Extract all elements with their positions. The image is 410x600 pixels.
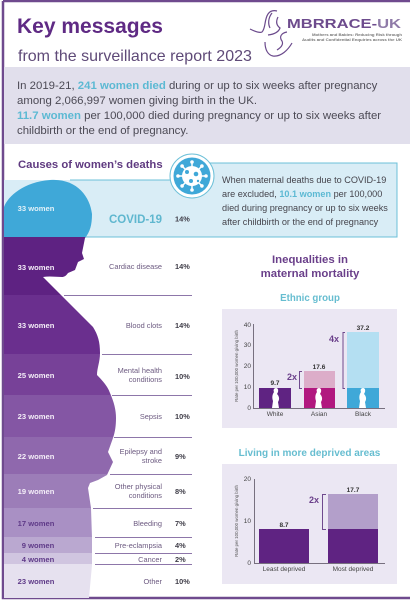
heading: ethnic group: Ethnic group: [280, 293, 340, 304]
heading: inequalities: maternal mortality: [261, 268, 360, 280]
logo: strapline: [302, 33, 403, 42]
cause labels: COVID-19: [109, 214, 162, 226]
chart: deprivation: Rate per 100,000 women giving birth: [234, 485, 239, 557]
panel: headline statistics: [4, 67, 410, 144]
text block: headline statistics: [17, 80, 381, 137]
callout text: When maternal deaths due to COVID-19: [222, 175, 386, 185]
women counts: 22 women: [18, 452, 55, 461]
category labels: [267, 411, 372, 418]
bar: Black: [347, 332, 379, 408]
cause labels: conditions: [129, 375, 162, 384]
multipliers: 2x: [287, 372, 297, 382]
cause labels: Blood clots: [126, 321, 162, 330]
y axis: 0: [247, 405, 251, 412]
cause labels: Pre-eclampsia: [115, 541, 163, 550]
category labels: Least deprived: [263, 566, 306, 573]
callout text: [222, 175, 388, 227]
text block: headline statistics: childbirth or the end of pregnancy.: [17, 125, 188, 137]
y axis: 0: [247, 560, 251, 567]
category labels: White: [267, 411, 284, 418]
bar values: 17.7: [347, 487, 360, 494]
cause labels: stroke: [142, 456, 162, 465]
multipliers: [287, 334, 339, 382]
chart: deprivation: [222, 464, 397, 584]
y axis: 10: [244, 384, 251, 391]
women counts: 23 women: [18, 577, 55, 586]
bar values: [279, 487, 360, 529]
callout text: are excluded, 10.1 women per 100,000: [222, 189, 382, 199]
heading: inequalities: Inequalities in: [272, 254, 348, 266]
women counts: 25 women: [18, 371, 55, 380]
y axis: 20: [244, 363, 251, 370]
cause labels: Sepsis: [140, 412, 162, 421]
multipliers: 4x: [329, 334, 339, 344]
cause labels: Other: [144, 577, 163, 586]
y axis: 30: [244, 342, 251, 349]
cause percentages: 2%: [175, 555, 186, 564]
bar values: 17.6: [313, 364, 326, 371]
cause labels: Cardiac disease: [109, 262, 162, 271]
bar: Most deprived: [328, 494, 378, 563]
women counts: 33 women: [18, 204, 55, 213]
category labels: Most deprived: [333, 566, 374, 573]
y axis: [244, 322, 251, 412]
icon: coronavirus: [170, 154, 214, 198]
subtitle: from the surveillance report 2023: [18, 48, 252, 65]
bracket: [322, 494, 326, 530]
cause labels: conditions: [129, 491, 162, 500]
women counts: 33 women: [18, 263, 55, 272]
women counts: 4 women: [22, 555, 55, 564]
heading: causes of deaths: Causes of women’s deaths: [18, 159, 163, 171]
logo: MBRRACE-UK: [250, 11, 403, 56]
cause percentages: 10%: [175, 372, 190, 381]
logo: strapline: Mothers and Babies: Reducing Risk through: [312, 33, 403, 37]
cause percentages: 14%: [175, 214, 190, 224]
cause percentages: 10%: [175, 412, 190, 421]
bar values: 9.7: [270, 380, 280, 387]
bar values: 8.7: [279, 522, 289, 529]
category labels: Asian: [311, 411, 328, 418]
cause labels: Mental health: [118, 366, 162, 375]
logo: mother and baby mark: [250, 11, 292, 56]
callout text: after childbirth or the end of pregnancy: [222, 217, 379, 227]
chart: ethnic group: Rate per 100,000 women giving birth: [234, 330, 239, 402]
bar values: [270, 325, 370, 387]
heading: inequalities: [261, 254, 360, 280]
women counts: 17 women: [18, 519, 55, 528]
women counts: 33 women: [18, 321, 55, 330]
cause labels: Other physical: [115, 482, 162, 491]
y axis: 40: [244, 322, 251, 329]
category labels: [263, 566, 374, 573]
cause separators: [64, 296, 192, 564]
women counts: 23 women: [18, 412, 55, 421]
cause percentages: 7%: [175, 519, 186, 528]
text block: headline statistics: 11.7 women per 100,000 died during pregnancy or up to six weeks after: [17, 110, 381, 122]
cause percentages: 10%: [175, 577, 190, 586]
y axis: 10: [244, 518, 251, 525]
heading: deprived areas: Living in more deprived areas: [239, 448, 381, 459]
multiplier: 2x: [309, 495, 319, 505]
cause labels: Bleeding: [133, 519, 162, 528]
cause labels: [109, 214, 163, 586]
panel: COVID-19 band and callout: [4, 163, 397, 237]
brackets: [300, 332, 345, 388]
title: Key messages: [17, 15, 163, 38]
women counts: 9 women: [22, 541, 55, 550]
bar values: 37.2: [357, 325, 370, 332]
bar: Asian: [304, 371, 335, 408]
cause labels: Epilepsy and: [120, 447, 162, 456]
category labels: Black: [355, 411, 372, 418]
women counts: 19 women: [18, 487, 55, 496]
cause labels: Cancer: [138, 555, 163, 564]
women counts: [18, 204, 55, 586]
cause percentages: 14%: [175, 321, 190, 330]
y axis: [244, 476, 251, 567]
callout text: died during pregnancy or up to six weeks: [222, 203, 388, 213]
chart: ethnic group: [222, 309, 397, 428]
text block: headline statistics: among 2,066,997 women giving birth in the UK.: [17, 95, 257, 107]
cause percentages: 8%: [175, 487, 186, 496]
cause percentages: 4%: [175, 541, 186, 550]
cause percentages: [175, 214, 190, 586]
logo: strapline: Audits and Confidential Enquiries across the UK: [302, 38, 402, 42]
y axis: 20: [244, 476, 251, 483]
cause percentages: 9%: [175, 452, 186, 461]
bar: White: [259, 388, 291, 408]
text block: headline statistics: In 2019-21, 241 women died during or up to six weeks after pregnancy: [17, 80, 378, 92]
cause percentages: 14%: [175, 262, 190, 271]
logo: wordmark: MBRRACE- UK: [287, 16, 402, 31]
chart: silhouette of deaths by cause: [4, 179, 124, 598]
bar: Least deprived: [259, 529, 309, 563]
